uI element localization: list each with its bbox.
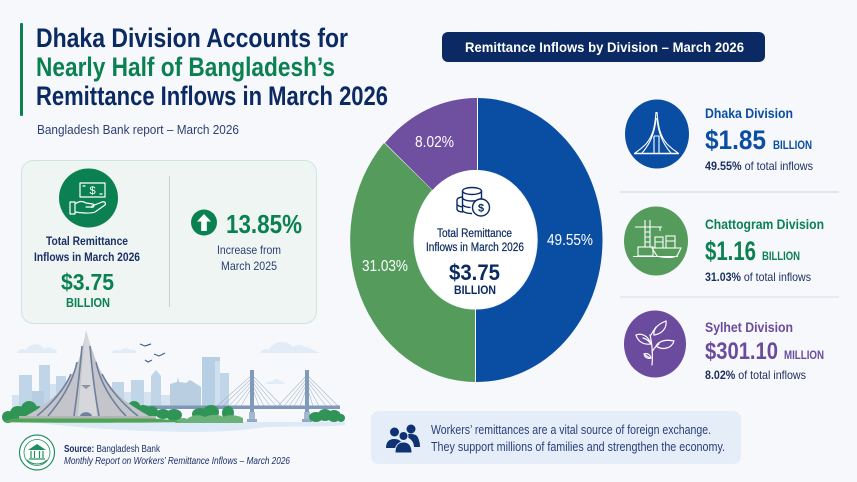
centre label [426,228,524,254]
slice: Sylhet [385,98,477,190]
source text [64,444,290,467]
national parliament monument [19,330,156,418]
Chattogram name: Chattogram Division [705,216,824,232]
Sylhet value: $301.10 [705,338,778,365]
label: Sylhet share: 8.02% [415,134,454,151]
callout text: They support millions of families and strengthen the economy. [431,440,725,454]
centre label: Total Remittance [437,228,512,240]
icon: Dhaka monument [625,100,689,168]
Dhaka value: $1.85 [705,125,766,155]
icon: Bangladesh Bank seal [20,435,54,470]
icon: port crane and ship [624,206,688,276]
water [30,422,345,432]
Sylhet value: MILLION [784,350,824,362]
Dhaka value: BILLION [773,140,812,152]
Chattogram value: BILLION [762,251,800,263]
donut chart [350,98,603,382]
title block: Nearly Half of Bangladesh’s [36,52,335,82]
label: Chattogram share: 31.03% [362,258,408,275]
icon: tea leaves [624,310,686,378]
chart heading: Remittance Inflows by Division – March 2026 [465,39,744,55]
panel: Dhaka Division [625,100,813,173]
slice: Dhaka [476,98,603,382]
total remittance value: BILLION [66,296,110,310]
panel: Sylhet Division [624,310,824,382]
Dhaka share: 49.55% of total inflows [705,159,813,173]
callout text [431,423,725,454]
total remittance value [61,269,114,310]
label: Dhaka share: 49.55% [547,232,593,249]
total remittance label: Inflows in March 2026 [34,250,140,264]
source text: Source: Bangladesh Bank [64,444,161,455]
Dhaka value [705,125,812,155]
icon: hand holding money: $ [89,185,96,197]
Sylhet share: 8.02% of total inflows [705,368,806,382]
Dhaka name: Dhaka Division [705,105,793,121]
centre value [449,260,500,297]
total remittance label [34,234,140,264]
title block [20,23,388,116]
chart heading [442,32,765,62]
Sylhet name: Sylhet Division [705,319,793,335]
Chattogram value: $1.16 [705,236,756,266]
donut centre summary [415,170,536,309]
illustration: Dhaka skyline, monument and bridge [2,330,345,432]
birds [140,344,165,362]
Chattogram share: 31.03% of total inflows [705,270,811,284]
centre value: BILLION [454,285,496,297]
panel: total remittance summary [22,160,316,324]
growth caption [217,243,281,273]
callout: why remittances matter [371,411,741,464]
callout text: Workers’ remittances are a vital source of foreign exchange. [431,423,711,437]
total remittance value: $3.75 [61,269,114,295]
growth percentage: 13.85% [226,209,302,239]
centre label: Inflows in March 2026 [426,242,524,254]
icon: up arrow [191,210,217,236]
growth caption: Increase from [217,243,281,257]
centre value: $3.75 [449,260,500,285]
growth caption: March 2025 [221,259,277,273]
title block: Dhaka Division Accounts for [36,23,348,53]
icon: coin stack: $ [478,202,484,214]
subtitle: Bangladesh Bank report – March 2026 [37,122,239,137]
total remittance label: Total Remittance [46,234,128,248]
title block: Remittance Inflows in March 2026 [36,81,388,111]
source text: Monthly Report on Workers’ Remittance Inflows – March 2026 [64,456,290,467]
slice: Chattogram [350,143,475,382]
bridge [140,370,340,422]
icon: hand holding money [59,168,118,228]
trees [2,401,345,423]
panel: Chattogram Division [624,206,824,284]
icon: group of people [386,424,420,453]
